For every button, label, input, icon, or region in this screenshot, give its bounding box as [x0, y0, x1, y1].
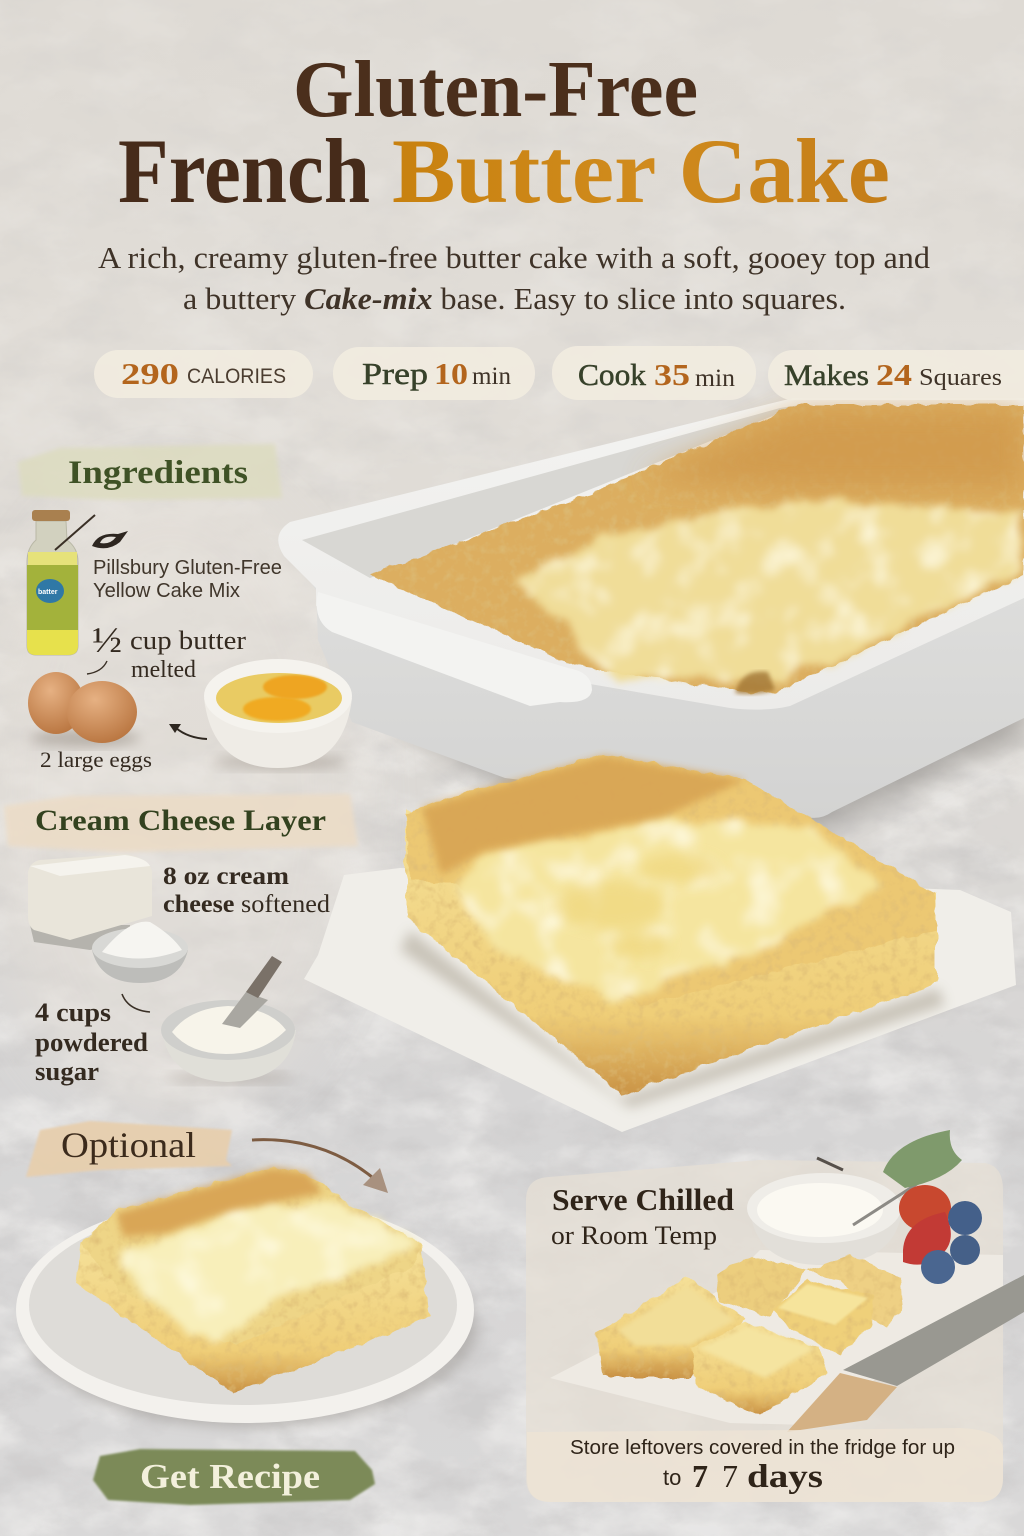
storage note: to [663, 1465, 681, 1490]
text: eggs: 2 large eggs [40, 747, 152, 772]
icon: cream bowl [747, 1158, 923, 1265]
cut notch [735, 671, 775, 694]
square middle [773, 1280, 873, 1355]
icon: eggs [28, 672, 140, 747]
plated cake slice [16, 1167, 476, 1428]
icon: small pointer [122, 994, 150, 1012]
text: butter: ½ [92, 620, 122, 660]
dish handle [317, 592, 592, 706]
text: powdered sugar: powdered [35, 1028, 149, 1057]
dish wall [280, 400, 1024, 818]
icon: glass bowl with spoon [161, 956, 296, 1084]
subtitle: a buttery Cake-mix base. Easy to slice into squares. [183, 281, 846, 316]
cake side [406, 808, 936, 1095]
text: butter [92, 620, 246, 683]
ingredients heading [18, 444, 282, 500]
pill: makes: Squares [919, 365, 1002, 391]
pill: makes: Makes [784, 359, 869, 392]
storage note: 7 [692, 1458, 708, 1494]
heading: serve chilled: or Room Temp [551, 1221, 717, 1250]
pill: cook: min [695, 365, 735, 392]
icon: egg bowl [204, 659, 352, 770]
text: powdered sugar [35, 998, 149, 1086]
plate [16, 1197, 474, 1423]
pill: prep: min [472, 363, 511, 390]
square front [692, 1323, 827, 1415]
icon: bottle: batter [38, 589, 58, 596]
icon: small pointer [87, 661, 107, 674]
text: cream cheese: cheese softened [163, 891, 331, 918]
text: cake mix [93, 557, 282, 602]
icon: berries and leaf [883, 1130, 982, 1284]
pill: cook: 35 [654, 357, 690, 392]
text: butter: melted [131, 657, 196, 683]
icon: bottle [27, 510, 128, 655]
text: cake mix: Pillsbury Gluten-Free [93, 557, 282, 579]
pill: makes: 24 [876, 357, 912, 392]
panel: cream cheese layer [28, 854, 331, 1086]
pill: calories [94, 350, 313, 398]
icon: knife [787, 1275, 1024, 1432]
storage note [527, 1428, 1003, 1502]
title: Butter Cake [392, 120, 890, 222]
pill: prep: Prep [362, 356, 428, 391]
panel: serve chilled [526, 1130, 1024, 1502]
pill: calories: CALORIES [187, 365, 286, 388]
storage note: Store leftovers covered in the fridge for up [570, 1437, 955, 1459]
main cake slice on paper towel [304, 754, 1016, 1132]
optional heading: Optional [61, 1125, 196, 1165]
slice top [80, 1167, 420, 1345]
icon: arrow to eggs [169, 724, 207, 739]
cream cheese layer heading: Cream Cheese Layer [35, 804, 326, 837]
icon: cream cheese block [28, 854, 152, 950]
panel: ingredients [27, 510, 352, 772]
pill: calories: 290 [121, 356, 179, 391]
custard top in dish [512, 500, 1024, 682]
square right back [807, 1255, 903, 1327]
heading: serve chilled [551, 1182, 734, 1250]
cake shadow [400, 930, 945, 1108]
get recipe button: Get Recipe [140, 1457, 320, 1496]
title: Gluten-Free [293, 46, 698, 134]
text: powdered sugar: sugar [35, 1057, 99, 1086]
cream cheese layer heading [4, 794, 358, 852]
storage note: days [747, 1459, 823, 1495]
pill: cook: Cook [578, 357, 646, 392]
square left [597, 1277, 747, 1377]
storage note: 7 [722, 1458, 738, 1494]
subtitle: A rich, creamy gluten-free butter cake with a soft, gooey top and [98, 240, 931, 275]
title [118, 46, 890, 222]
dish rim [278, 398, 1024, 710]
pill: prep: 10 [434, 356, 468, 391]
text: powdered sugar: 4 cups [35, 998, 111, 1027]
pill: cook [552, 346, 756, 400]
cake top [406, 754, 936, 1005]
square back middle [717, 1257, 807, 1317]
cake in dish: back crust [640, 408, 1024, 490]
arrow: optional to plate [252, 1140, 388, 1193]
paper towel [304, 868, 1016, 1132]
title: French [118, 120, 370, 222]
ingredients heading: Ingredients [68, 455, 248, 491]
crust top [422, 756, 745, 875]
text: butter: cup butter [130, 626, 246, 655]
cake squares [597, 1255, 903, 1415]
cake in dish [370, 405, 1024, 692]
get recipe button [93, 1449, 375, 1505]
heading: serve chilled: Serve Chilled [552, 1182, 734, 1217]
parchment [550, 1250, 1003, 1425]
slice cream [120, 1200, 418, 1350]
slice side [75, 1243, 430, 1393]
baking dish with cake [278, 398, 1024, 832]
subtitle [98, 240, 931, 316]
custard pools [555, 854, 720, 959]
pill: makes [768, 350, 1024, 400]
icon: sugar bowl [92, 922, 188, 983]
text: cream cheese: 8 oz cream [163, 863, 289, 890]
dish inner wall [302, 405, 800, 578]
text: cream cheese [163, 863, 331, 918]
text: cake mix: Yellow Cake Mix [93, 580, 240, 602]
pill: prep [333, 347, 535, 400]
optional heading [26, 1121, 232, 1177]
custard top [456, 818, 878, 1003]
stat pills [94, 346, 1024, 400]
slice crust [117, 1168, 323, 1237]
